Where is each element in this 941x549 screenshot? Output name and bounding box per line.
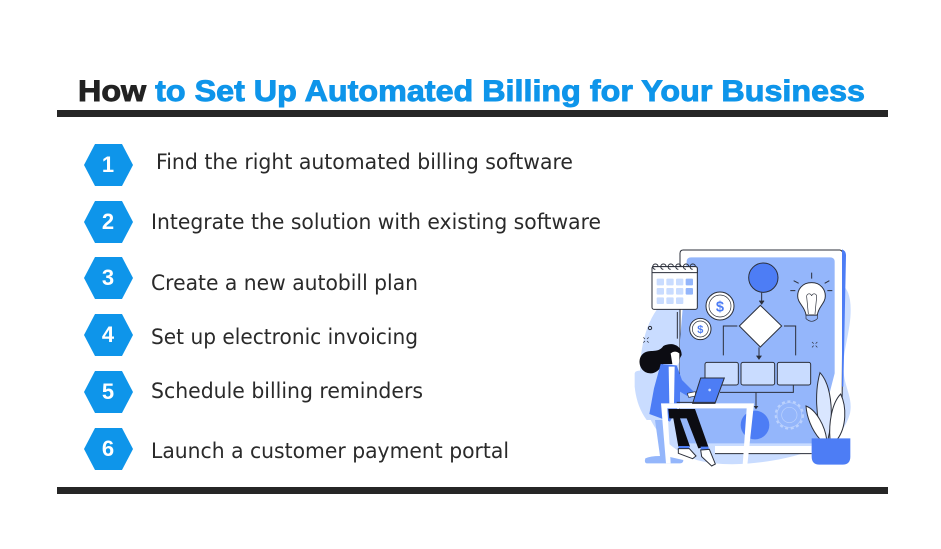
step 6: 6 [102,436,114,461]
step 6: Launch a customer payment portal [151,439,509,464]
step 1: Find the right automated billing software [156,150,573,175]
icon: dollar coin large [706,292,734,320]
flowchart [705,263,811,439]
bottom rule [57,487,888,494]
icon: dollar coin large: $ [716,299,724,315]
step 1: 1 [102,152,114,177]
step 3: Create a new autobill plan [151,271,418,296]
chair [635,371,667,420]
step 5 [84,371,423,413]
step 1 [84,144,573,186]
step 3: 3 [102,265,114,290]
icon: dollar coin small: $ [697,324,703,336]
step 4: Set up electronic invoicing [151,325,418,350]
icon: calendar [652,264,697,309]
woman legs [668,409,715,466]
icon: light bulb [790,273,832,321]
icon: dollar coin small [690,318,711,340]
step 3 [84,257,418,299]
step 6 [84,428,509,470]
step 2 [84,201,601,243]
step 4: 4 [102,322,115,347]
step 5: 5 [102,379,114,404]
icon: gear [776,401,803,429]
potted plant [806,373,850,465]
woman upper body [640,344,696,422]
step 5: Schedule billing reminders [151,379,423,404]
title: How to Set Up Automated Billing for Your Business [78,75,865,108]
top rule [57,110,888,117]
step 4 [84,314,418,356]
desk [661,403,754,465]
step 2: Integrate the solution with existing software [151,210,601,235]
decorative sparkles [643,326,817,347]
illustration: automated billing workflow [635,249,851,466]
laptop [677,378,724,403]
step 2: 2 [102,209,114,234]
screen panel [680,257,835,443]
